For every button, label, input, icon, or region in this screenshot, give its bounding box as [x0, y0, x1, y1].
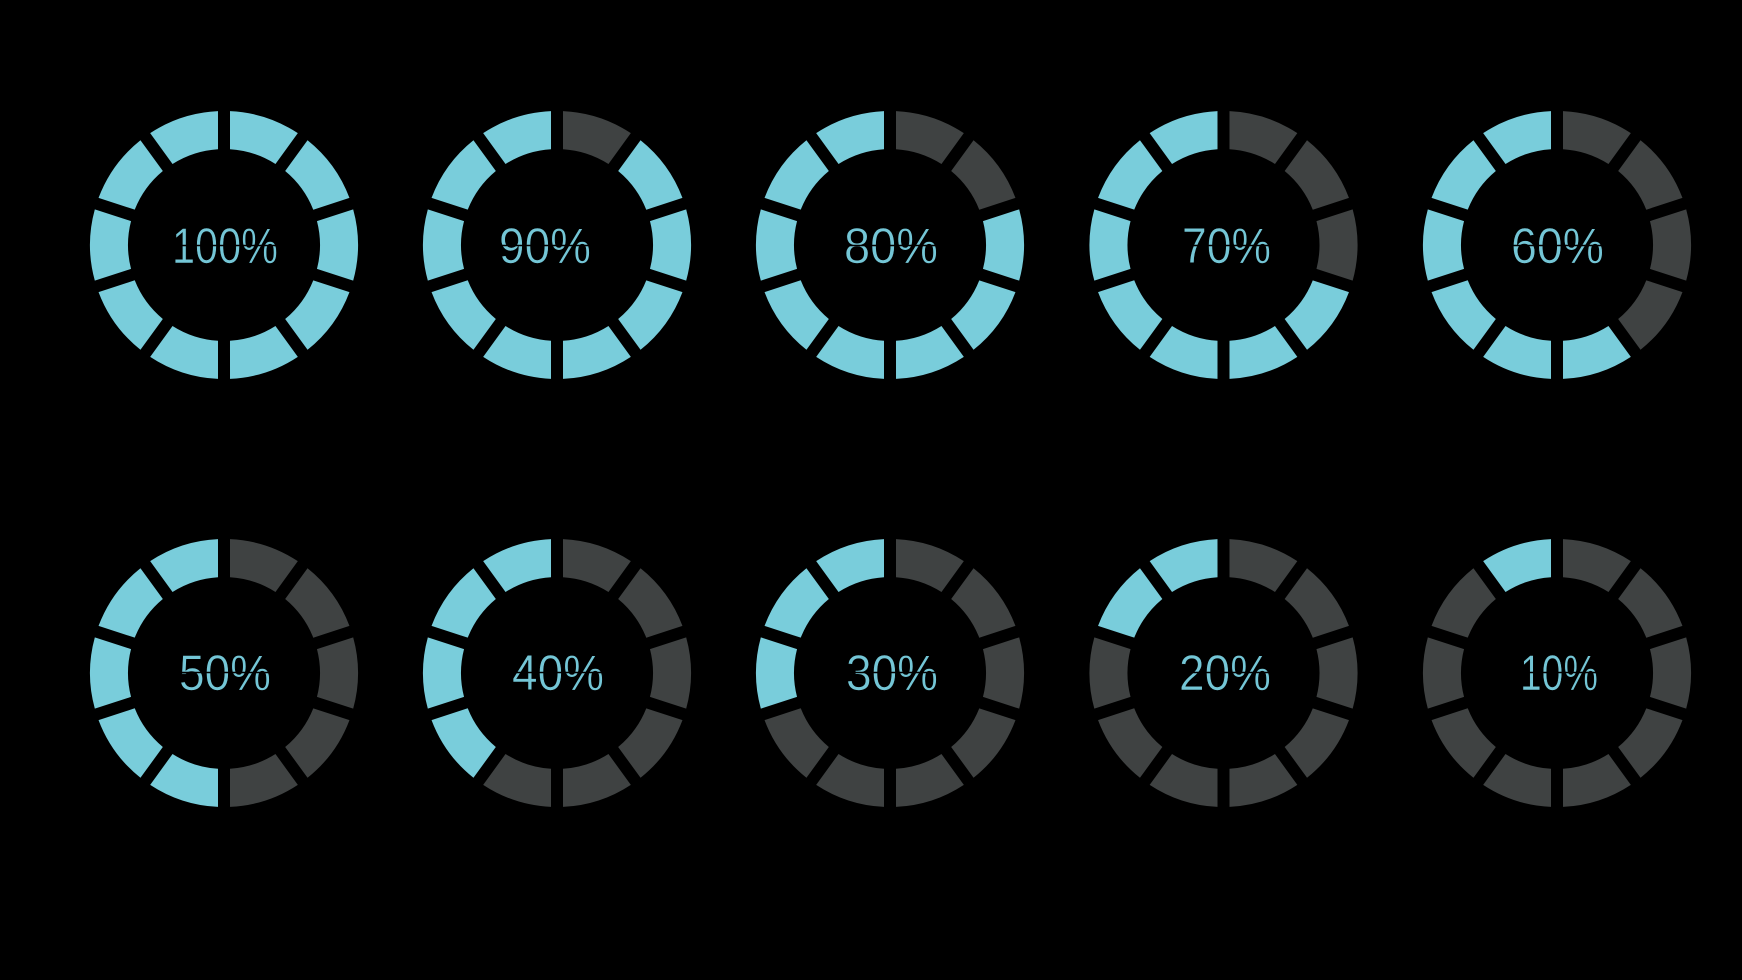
ring segments: 8 of 10 filled [740, 93, 1040, 397]
ring segments: 5 of 10 filled [74, 521, 374, 825]
ring segments: 4 of 10 filled [407, 521, 707, 825]
ring segments: 3 of 10 filled [740, 521, 1040, 825]
ring segments: 6 of 10 filled [1407, 93, 1707, 397]
value label: 80%: 80% [844, 218, 938, 274]
value label: 30%: 30% [846, 645, 938, 701]
ring segments: 9 of 10 filled [407, 93, 707, 397]
ring: 90% [407, 93, 707, 397]
ring: 50% [74, 521, 374, 825]
ring: 80% [740, 93, 1040, 397]
value label: 100%: 100% [172, 218, 278, 274]
ring: 40% [407, 521, 707, 825]
value label: 40%: 40% [512, 645, 604, 701]
ring: 20% [1073, 521, 1374, 825]
ring segments: 2 of 10 filled [1073, 521, 1374, 825]
ring: 70% [1073, 93, 1374, 397]
ring: 10% [1407, 521, 1707, 825]
ring: 100% [74, 93, 374, 397]
value label: 90%: 90% [499, 218, 591, 274]
ring segments: 10 of 10 filled [74, 93, 374, 397]
value label: 70%: 70% [1182, 218, 1271, 274]
ring: 30% [740, 521, 1040, 825]
value label: 10%: 10% [1520, 645, 1598, 701]
ring segments: 7 of 10 filled [1073, 93, 1374, 397]
value label: 20%: 20% [1179, 645, 1271, 701]
value label: 60%: 60% [1511, 218, 1604, 274]
ring: 60% [1407, 93, 1707, 397]
ring segments: 1 of 10 filled [1407, 521, 1707, 825]
value label: 50%: 50% [179, 645, 271, 701]
